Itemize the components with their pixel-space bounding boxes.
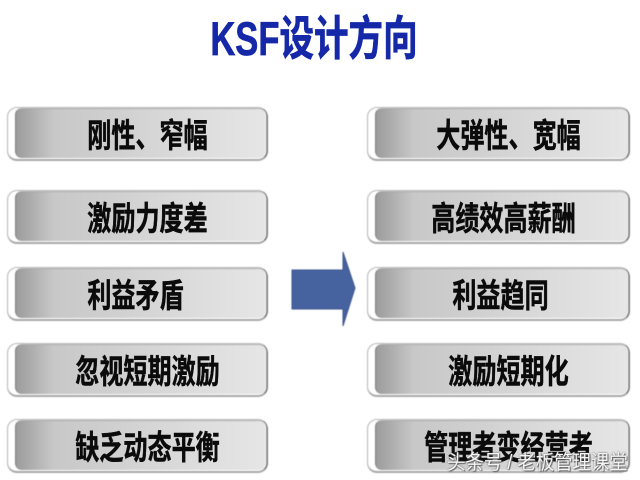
title: KSF设计方向 — [210, 12, 418, 65]
item: 管理者变经营者: 管理者变经营者 — [424, 429, 593, 466]
item: 大弹性、宽幅 — [366, 106, 631, 162]
item: 高绩效高薪酬 — [366, 190, 631, 244]
item: 激励短期化 — [366, 342, 631, 398]
item: 激励力度差: 激励力度差 — [87, 200, 208, 237]
item: 缺乏动态平衡 — [6, 418, 269, 474]
item: 大弹性、宽幅: 大弹性、宽幅 — [436, 117, 581, 154]
item: 忽视短期激励: 忽视短期激励 — [75, 353, 220, 390]
panel: left current state list — [6, 106, 269, 474]
arrow: pointing right — [290, 251, 356, 327]
panel: right design direction list — [366, 106, 631, 474]
item: 缺乏动态平衡: 缺乏动态平衡 — [75, 429, 220, 466]
item: 利益趋同 — [366, 266, 631, 322]
item: 管理者变经营者 — [366, 418, 631, 474]
item: 利益矛盾: 利益矛盾 — [87, 277, 184, 314]
item: 高绩效高薪酬: 高绩效高薪酬 — [431, 200, 576, 237]
watermark: 头条号 / 老板管理课堂 — [447, 452, 628, 474]
item: 激励力度差 — [6, 190, 269, 244]
item: 刚性、窄幅: 刚性、窄幅 — [87, 117, 208, 154]
item: 激励短期化: 激励短期化 — [448, 353, 569, 390]
item: 刚性、窄幅 — [6, 106, 269, 162]
item: 利益趋同: 利益趋同 — [452, 277, 549, 314]
item: 利益矛盾 — [6, 266, 269, 322]
item: 忽视短期激励 — [6, 342, 269, 398]
